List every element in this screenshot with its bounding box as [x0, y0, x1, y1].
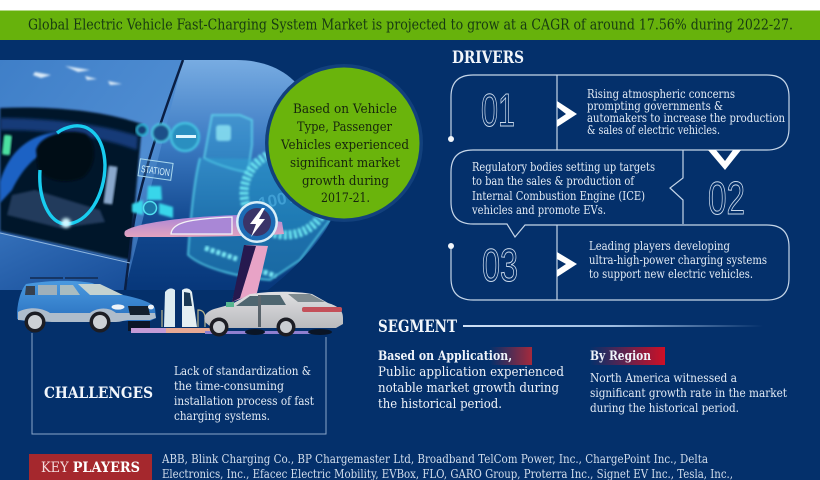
panel: segment: [378, 317, 787, 415]
driver 02: Regulatory bodies setting up targets: [472, 159, 655, 174]
driver 01: [481, 84, 785, 137]
charger units: [131, 288, 315, 334]
driver 02: to ban the sales & production of: [472, 173, 635, 188]
application text: notable market growth during: [378, 381, 559, 396]
challenges text: charging systems.: [174, 408, 270, 423]
green callout circle: growth during: [302, 174, 389, 189]
green callout circle: Based on Vehicle: [293, 102, 397, 117]
application text: Public application experienced: [378, 365, 564, 380]
challenges text: installation process of fast: [174, 393, 314, 408]
challenges text: Lack of standardization &: [174, 363, 311, 378]
driver 02: vehicles and promote EVs.: [471, 202, 606, 217]
green callout circle: [265, 64, 423, 222]
drivers connecting outline: [448, 75, 789, 300]
panel: key players: [29, 451, 733, 480]
green callout circle: 2017-21.: [321, 191, 370, 206]
driver 02: [471, 150, 745, 224]
segment heading: SEGMENT: [378, 317, 457, 337]
driver 01: 01: [481, 84, 515, 136]
header banner: [0, 0, 820, 40]
challenges text: [174, 363, 314, 423]
region text: significant growth rate in the market: [590, 385, 787, 400]
station badge icon: [236, 201, 278, 243]
panel: drivers: [448, 48, 789, 300]
green callout circle: significant market: [290, 156, 401, 171]
region text: By Region: [590, 349, 651, 364]
green callout circle: Type, Passenger: [297, 120, 393, 135]
region text: [590, 349, 787, 415]
challenges text: the time-consuming: [174, 378, 284, 393]
charging station canopy: [124, 201, 284, 302]
application text: Based on Application,: [378, 349, 512, 364]
driver 03: [482, 238, 767, 291]
region text: during the historical period.: [590, 400, 739, 415]
EV charging port photo: [0, 60, 340, 292]
driver 03: Leading players developing: [589, 238, 730, 253]
green callout circle: Vehicles experienced: [280, 138, 409, 153]
driver 02: Internal Combustion Engine (ICE): [472, 188, 645, 203]
region highlight: [590, 347, 665, 365]
key players list: [161, 451, 733, 480]
driver 03: ultra-high-power charging systems: [589, 252, 767, 267]
driver 01: prompting governments &: [587, 98, 723, 113]
EV charging port photo: STATION: [140, 164, 170, 179]
EV charging port photo: 100%: [257, 186, 303, 213]
region text: North America witnessed a: [590, 370, 738, 385]
driver 01: Rising atmospheric concerns: [587, 86, 735, 101]
challenges frame: [32, 333, 326, 434]
driver 03: 03: [482, 239, 518, 291]
key players tag: [29, 454, 152, 480]
application text: the historical period.: [378, 397, 502, 412]
driver 02: 02: [708, 172, 745, 224]
application text: [378, 349, 564, 412]
blue SUV: [17, 278, 156, 332]
key players list: ABB, Blink Charging Co., BP Chargemaster Ltd, Broadband TelCom Power, Inc., ChargePoint Inc., Delta: [161, 451, 709, 466]
panel: challenges: [32, 333, 326, 434]
driver 01: & sales of electric vehicles.: [587, 122, 720, 137]
challenges heading: CHALLENGES: [44, 383, 153, 402]
drivers heading: DRIVERS: [452, 48, 524, 68]
driver 03: to support new electric vehicles.: [589, 266, 753, 281]
key players tag: KEY PLAYERS: [41, 460, 140, 476]
silver sedan: [204, 292, 343, 336]
segment heading rule: [463, 325, 763, 327]
application highlight: [490, 347, 532, 365]
